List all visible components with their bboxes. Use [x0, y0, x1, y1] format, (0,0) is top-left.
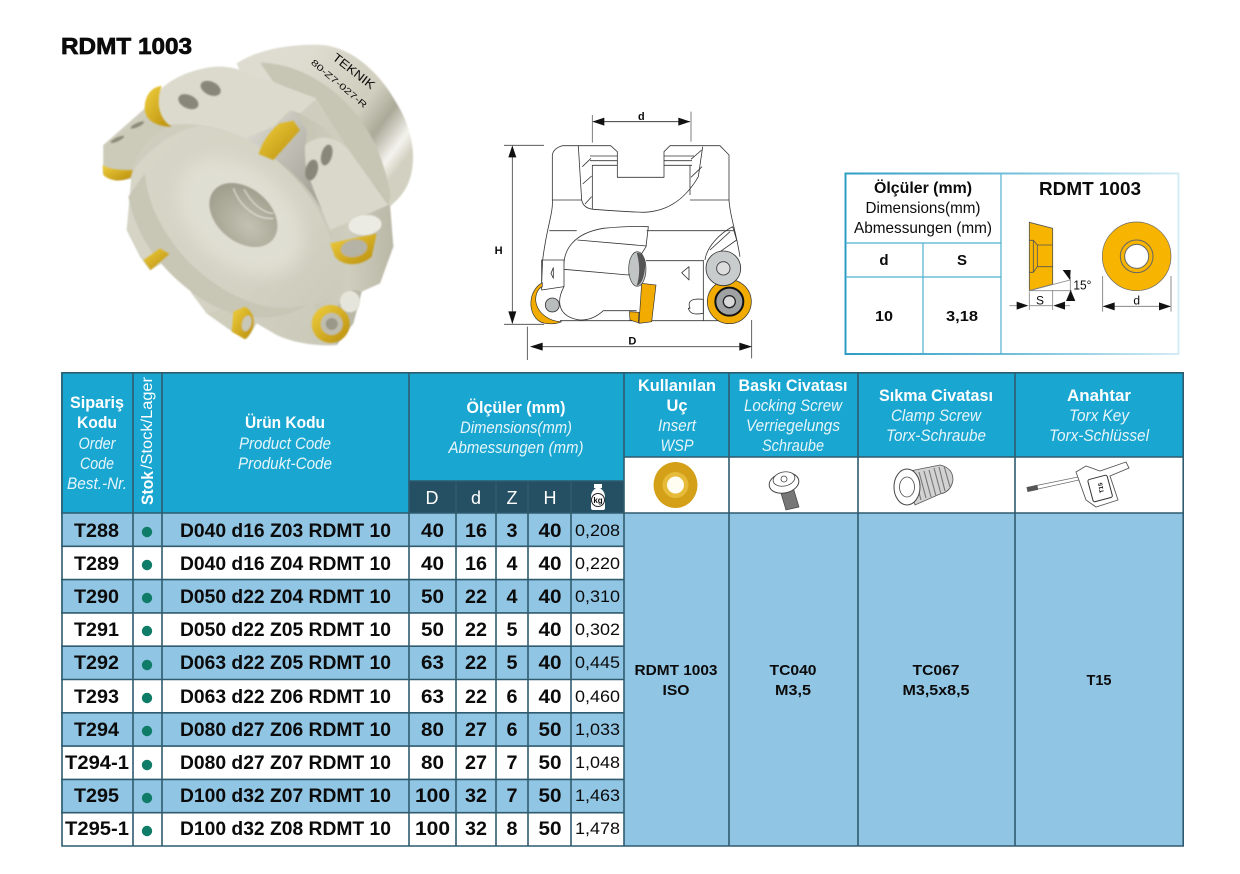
product table [61, 372, 1184, 846]
merged cell: insert: RDMT 1003 [634, 662, 718, 679]
header: insert [638, 376, 716, 455]
header: torx key: Anahtar [1067, 386, 1131, 405]
row T294: 50 [538, 720, 562, 741]
dimension values: 3,18 [946, 308, 978, 325]
dimension values: 10 [875, 308, 893, 325]
row T293: 63 [421, 687, 444, 708]
row T293 [74, 687, 620, 708]
row T295: 1,463 [575, 786, 620, 805]
icon: insert [654, 462, 698, 508]
row T295-1: T295-1 [65, 819, 129, 840]
row T289: D040 d16 Z04 RDMT 10 [180, 554, 391, 575]
icon: locking screw [767, 470, 801, 510]
header: dimensions: Ölçüler (mm) [466, 398, 566, 417]
dimension d: d [638, 111, 645, 123]
row T290: 22 [465, 587, 487, 608]
row T293: 6 [506, 687, 518, 708]
row T292: 22 [465, 653, 487, 674]
dimension D: D [628, 335, 636, 347]
row T295: T295 [74, 786, 119, 807]
insert title: RDMT 1003 [1039, 179, 1141, 199]
row T290: D050 d22 Z04 RDMT 10 [180, 587, 391, 608]
header: order code: Best.-Nr. [67, 474, 127, 493]
row T291: 22 [465, 620, 487, 641]
insert side and top drawing: d [1133, 293, 1140, 307]
icon: clamp screw [894, 465, 953, 505]
icon: torx key [1026, 462, 1129, 507]
header: locking screw: Locking Screw [744, 396, 844, 415]
merged cell: torx key: T15 [1086, 672, 1112, 689]
merged cell: locking screw: TC040 [770, 662, 816, 679]
row T294-1: D080 d27 Z07 RDMT 10 [180, 753, 391, 774]
icon: torx key: T15 [1098, 481, 1106, 493]
dimension d [592, 111, 691, 143]
cutter outline [542, 146, 740, 321]
row T290: T290 [74, 587, 119, 608]
header: stock: /Stock/Lager [139, 376, 156, 469]
dimensions heading: Abmessungen (mm) [854, 220, 992, 237]
row T294-1 [65, 753, 620, 774]
row T294-1: 80 [421, 753, 444, 774]
header: insert: Kullanılan [638, 376, 716, 395]
row T288 [74, 521, 620, 542]
row T293: 22 [465, 687, 487, 708]
header: insert: WSP [660, 436, 694, 455]
row T288: 16 [465, 521, 487, 542]
header: locking screw: Baskı Civatası [738, 376, 848, 395]
row T294 [74, 720, 620, 741]
row T294: 27 [465, 720, 487, 741]
row T293: T293 [74, 687, 119, 708]
row T291: 50 [421, 620, 444, 641]
dimensions heading: Ölçüler (mm) [874, 178, 972, 197]
merged cell: insert [634, 662, 718, 699]
header: product code: Product Code [239, 434, 331, 453]
dimension H: H [495, 245, 503, 257]
header: torx key [1049, 386, 1150, 445]
merged cell: clamp screw [902, 662, 970, 699]
header: order code [67, 393, 127, 493]
row T290: 50 [421, 587, 444, 608]
merged cell: locking screw: M3,5 [775, 682, 811, 699]
row T292: 0,445 [575, 653, 620, 672]
header: order code: Order [78, 434, 117, 453]
header: locking screw: Verriegelungs [746, 416, 840, 435]
dimension D [527, 320, 752, 360]
header: clamp screw: Clamp Screw [891, 406, 983, 425]
header: product code: Produkt-Code [238, 454, 332, 473]
icon: weight kg: kg [593, 496, 603, 505]
row T295-1: 100 [415, 819, 450, 840]
header: stock [138, 376, 157, 505]
row T294: 1,033 [575, 720, 620, 739]
header: order code: Sipariş [70, 393, 124, 412]
header: locking screw: Schraube [762, 436, 824, 455]
row T294: 80 [421, 720, 444, 741]
row T289 [74, 554, 620, 575]
row T295 [74, 786, 620, 807]
milling cutter photo: 80-Z7-027-R [309, 57, 369, 110]
row T288: T288 [74, 521, 119, 542]
technical drawing of cutter with dimensions [495, 111, 752, 360]
row T294: 6 [506, 720, 518, 741]
insert side and top drawing: 15° [1073, 278, 1091, 293]
row T288: 3 [506, 521, 518, 542]
row T289: 0,220 [575, 554, 620, 573]
row T294-1: 50 [538, 753, 562, 774]
row T291: T291 [74, 620, 119, 641]
row T295-1: 32 [465, 819, 487, 840]
row T291 [74, 620, 620, 641]
milling cutter photo [103, 45, 413, 345]
header: dimension symbols: D [426, 488, 438, 508]
row T294: D080 d27 Z06 RDMT 10 [180, 720, 391, 741]
row T292: T292 [74, 653, 119, 674]
row T295: 32 [465, 786, 487, 807]
row T288: 0,208 [575, 521, 620, 540]
row T290 [74, 587, 620, 608]
row T295-1: D100 d32 Z08 RDMT 10 [180, 819, 391, 840]
header: insert: Uç [666, 396, 688, 415]
row T288: 40 [538, 521, 562, 542]
header: product code: Ürün Kodu [245, 413, 325, 432]
row T292: D063 d22 Z05 RDMT 10 [180, 653, 391, 674]
row T292: 40 [538, 653, 562, 674]
row T295-1: 1,478 [575, 819, 620, 838]
header: insert: Insert [658, 416, 697, 435]
dimensions heading [854, 178, 992, 237]
row T294-1: 27 [465, 753, 487, 774]
row T291: 0,302 [575, 620, 620, 639]
merged cell: insert: ISO [662, 682, 690, 699]
row T291: 5 [506, 620, 518, 641]
header: dimension symbols [426, 488, 556, 508]
header: clamp screw: Torx-Schraube [886, 426, 986, 445]
row T291: D050 d22 Z05 RDMT 10 [180, 620, 391, 641]
row T293: 40 [538, 687, 562, 708]
dimension values [875, 252, 978, 325]
row T289: 40 [538, 554, 562, 575]
row T292: 5 [506, 653, 518, 674]
row T295: 100 [415, 786, 450, 807]
row T288: D040 d16 Z03 RDMT 10 [180, 521, 391, 542]
header: dimension symbols: Z [506, 488, 518, 508]
milling cutter photo: TEKNIK [330, 50, 378, 92]
merged cell: clamp screw: M3,5x8,5 [902, 682, 970, 699]
row T293: D063 d22 Z06 RDMT 10 [180, 687, 391, 708]
row T294-1: 1,048 [575, 753, 620, 772]
row T289: T289 [74, 554, 119, 575]
merged cell: clamp screw: TC067 [912, 662, 960, 679]
merged cell: locking screw [770, 662, 816, 699]
header: locking screw [738, 376, 848, 455]
header: dimensions: Abmessungen (mm) [448, 438, 584, 457]
row T289: 16 [465, 554, 487, 575]
row T295: 7 [506, 786, 518, 807]
row T295-1: 50 [538, 819, 562, 840]
row T290: 4 [506, 587, 518, 608]
insert side and top drawing [1009, 222, 1171, 312]
header: dimension symbols: H [544, 488, 556, 508]
row T291: 40 [538, 620, 562, 641]
row T295: D100 d32 Z07 RDMT 10 [180, 786, 391, 807]
header: order code: Code [80, 454, 114, 473]
header: stock: Stok [138, 471, 157, 505]
carbide inserts and screws [531, 251, 751, 324]
header: dimensions [448, 398, 584, 457]
header: clamp screw: Sıkma Civatası [879, 386, 993, 405]
title: RDMT 1003 [61, 33, 192, 59]
row T290: 0,310 [575, 587, 620, 606]
row T293: 0,460 [575, 687, 620, 706]
insert dimensions panel [846, 174, 1178, 354]
row T290: 40 [538, 587, 562, 608]
row T292: 63 [421, 653, 444, 674]
dimensions heading: Dimensions(mm) [866, 200, 980, 217]
header: product code [238, 413, 332, 473]
row T295-1: 8 [506, 819, 518, 840]
row T289: 40 [421, 554, 444, 575]
header: clamp screw [879, 386, 993, 445]
row T288: 40 [421, 521, 444, 542]
header: order code: Kodu [77, 413, 117, 432]
dimension H [495, 145, 544, 324]
row T294-1: 7 [506, 753, 518, 774]
table header backgrounds [61, 372, 1184, 513]
row T292 [74, 653, 620, 674]
header: dimensions: Dimensions(mm) [460, 418, 572, 437]
row T294-1: T294-1 [65, 753, 129, 774]
row T294: T294 [74, 720, 119, 741]
icon: weight kg [591, 484, 605, 510]
dimension values: S [957, 252, 967, 269]
header: torx key: Torx Key [1069, 406, 1130, 425]
row T289: 4 [506, 554, 518, 575]
insert side and top drawing: S [1036, 293, 1044, 307]
header: torx key: Torx-Schlüssel [1049, 426, 1150, 445]
table row backgrounds [61, 513, 1184, 846]
row T295-1 [65, 819, 620, 840]
dimension values: d [879, 252, 889, 269]
header: dimension symbols: d [471, 488, 481, 508]
row T295: 50 [538, 786, 562, 807]
